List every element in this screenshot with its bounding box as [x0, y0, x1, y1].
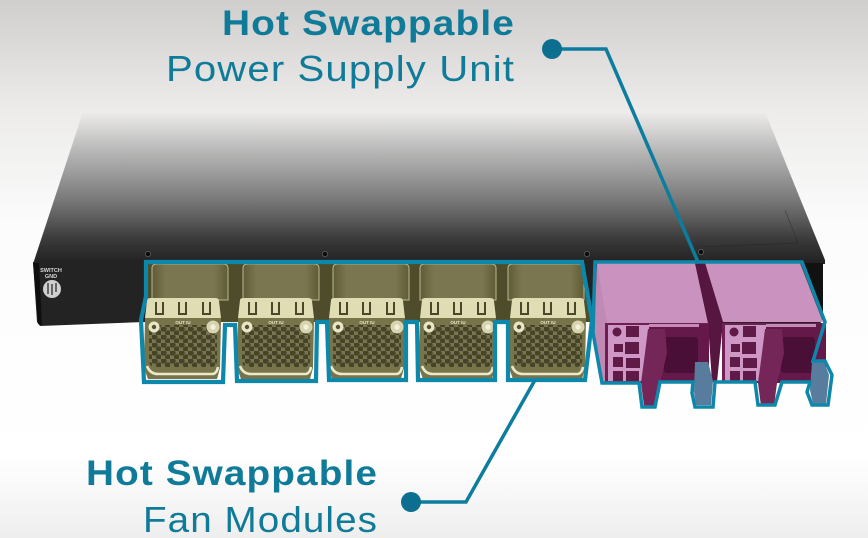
fan module 2 [237, 264, 319, 379]
psu 2 front [722, 323, 826, 406]
ground label: SWITCH [40, 268, 62, 274]
heading: power supply: Power Supply Unit [166, 48, 515, 89]
chassis front panel [33, 262, 823, 330]
tab 1 [694, 362, 713, 405]
ground screw [43, 280, 61, 298]
fan labels [175, 320, 556, 325]
fan labels: OUT IU [359, 320, 375, 325]
power supply units highlight [593, 262, 832, 407]
heading: fan modules: Hot Swappable [86, 454, 378, 493]
psu 2 top [705, 263, 823, 322]
psu 1 front [605, 323, 709, 406]
fan housing backing [148, 263, 590, 322]
fan labels: OUT IU [450, 320, 466, 325]
fan labels: OUT IU [175, 320, 191, 325]
chassis screws [145, 249, 704, 257]
psu 1 left edge [594, 263, 607, 382]
vent panel outline [702, 210, 798, 247]
psu 1 top [597, 263, 708, 323]
fan module 5 [508, 264, 586, 379]
heading: power supply: Hot Swappable [222, 4, 515, 43]
fan outline [141, 262, 592, 382]
switch chassis [33, 112, 825, 330]
fan modules highlight [141, 262, 592, 382]
callout line: fan modules [401, 380, 535, 512]
fan labels: OUT IU [540, 320, 556, 325]
heading: fan modules [86, 454, 378, 538]
fan module 3 [328, 264, 409, 379]
tab 2 [810, 362, 829, 404]
psu divider [695, 263, 723, 382]
callout line: power supply [542, 39, 698, 262]
fan module 1 [144, 264, 228, 379]
chassis top surface [33, 112, 825, 264]
fan labels: OUT IU [268, 320, 284, 325]
psu outline [593, 262, 832, 407]
heading: power supply [166, 4, 515, 89]
switch chassis: GND [45, 274, 57, 280]
fan module 4 [419, 264, 496, 379]
